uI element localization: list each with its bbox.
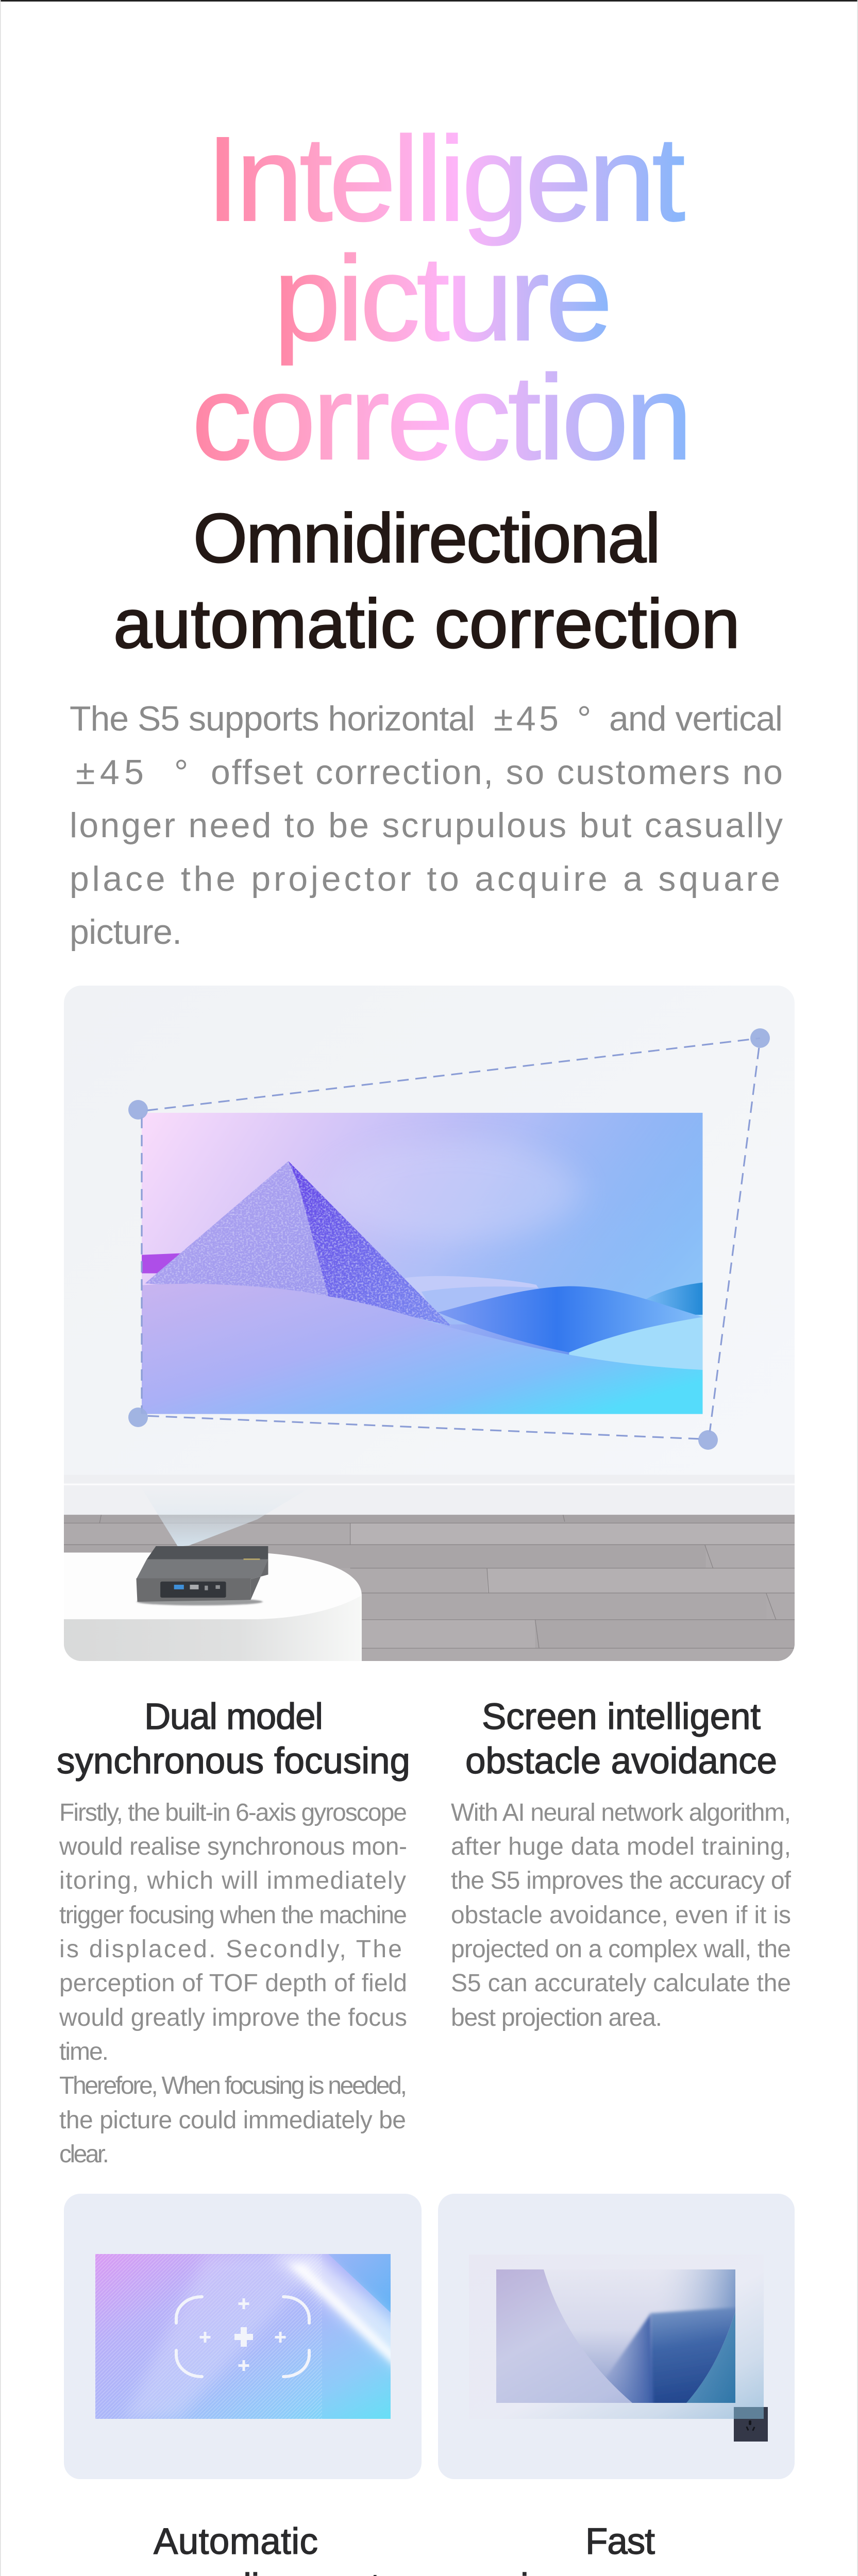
icon: wall socket	[734, 2407, 768, 2442]
panel: room scene with keystone correction	[55, 986, 804, 1667]
heading: obstacle avoidance	[465, 1697, 777, 1782]
intro paragraph: place the projector to acquire a square	[70, 859, 780, 899]
intro paragraph	[70, 699, 783, 952]
projection beam	[156, 1511, 270, 1546]
text: dual model description: Therefore, When focusing is needed,	[59, 2072, 407, 2099]
text: dual model description: would realise synchronous mon-	[59, 1833, 407, 1860]
pyramid	[145, 1161, 451, 1326]
heading: fast image zoom: Fast	[585, 2521, 655, 2562]
icon: focus brackets	[176, 2297, 309, 2377]
text: dual model description: perception of TOF depth of field	[59, 1970, 407, 1997]
heading: dual model	[57, 1697, 410, 1782]
text: obstacle avoidance description: With AI neural network algorithm,	[451, 1799, 791, 1826]
heading: dual model: synchronous focusing	[57, 1741, 410, 1782]
text: dual model description: trigger focusing when the machine	[59, 1902, 407, 1929]
text: obstacle avoidance description	[451, 1799, 792, 2031]
text: dual model description: the picture could immediately be	[59, 2107, 406, 2134]
heading: automatic screen alignment	[92, 2521, 380, 2576]
text: obstacle avoidance description: after huge data model training,	[451, 1833, 791, 1860]
intro paragraph: °	[174, 753, 188, 792]
intro paragraph: The S5 supports horizontal	[70, 699, 475, 738]
subtitle	[113, 499, 740, 663]
text: dual model description: itoring, which will immediately	[59, 1867, 406, 1894]
dashed keystone frame	[142, 1038, 760, 1439]
text: obstacle avoidance description: S5 can accurately calculate the	[451, 1970, 791, 1997]
panel: focusing image	[64, 2194, 422, 2479]
title: picture	[274, 231, 613, 366]
intro paragraph: offset correction, so customers no	[211, 753, 783, 792]
panel: obstacle avoidance image	[438, 2194, 795, 2479]
intro paragraph: and vertical	[609, 699, 783, 738]
subtitle: Omnidirectional	[193, 499, 661, 577]
text: dual model description: time.	[59, 2038, 109, 2065]
text: dual model description: Firstly, the built-in 6-axis gyroscope	[59, 1799, 407, 1826]
subtitle: automatic correction	[113, 585, 740, 663]
text: obstacle avoidance description: best projection area.	[451, 2004, 662, 2031]
sand dune	[142, 1284, 702, 1414]
text: dual model description: clear.	[59, 2141, 109, 2168]
text: dual model description: is displaced. Secondly, The	[59, 1936, 402, 1963]
heading: automatic screen alignment: Automatic	[154, 2521, 318, 2562]
intro paragraph: longer need to be scrupulous but casually	[70, 806, 783, 845]
baseboard	[64, 1475, 795, 1485]
text: obstacle avoidance description: the S5 improves the accuracy of	[451, 1867, 792, 1894]
heading: fast image zoom	[520, 2521, 718, 2576]
text: obstacle avoidance description: projected on a complex wall, the	[451, 1936, 791, 1963]
intro paragraph: ±45	[494, 699, 559, 738]
heading: dual model: Dual model	[144, 1697, 323, 1737]
corner handles	[128, 1028, 770, 1450]
text: obstacle avoidance description: obstacle avoidance, even if it is	[451, 1902, 791, 1929]
title: correction	[192, 350, 693, 485]
text: dual model description: would greatly improve the focus	[59, 2004, 407, 2031]
text: dual model description	[59, 1799, 407, 2168]
intro paragraph: picture.	[70, 912, 182, 952]
heading: obstacle avoidance: Screen intelligent	[482, 1697, 761, 1737]
icon: projector	[136, 1546, 268, 1605]
icon: focus crosshair	[200, 2298, 285, 2371]
table	[55, 1552, 362, 1667]
title	[192, 111, 693, 485]
title: Intelligent	[206, 111, 685, 246]
heading: obstacle avoidance: obstacle avoidance	[465, 1741, 777, 1782]
intro paragraph: ±45	[76, 753, 144, 792]
projected desert picture	[142, 1113, 702, 1414]
floor planks	[55, 1515, 804, 1667]
intro paragraph: °	[577, 699, 591, 738]
